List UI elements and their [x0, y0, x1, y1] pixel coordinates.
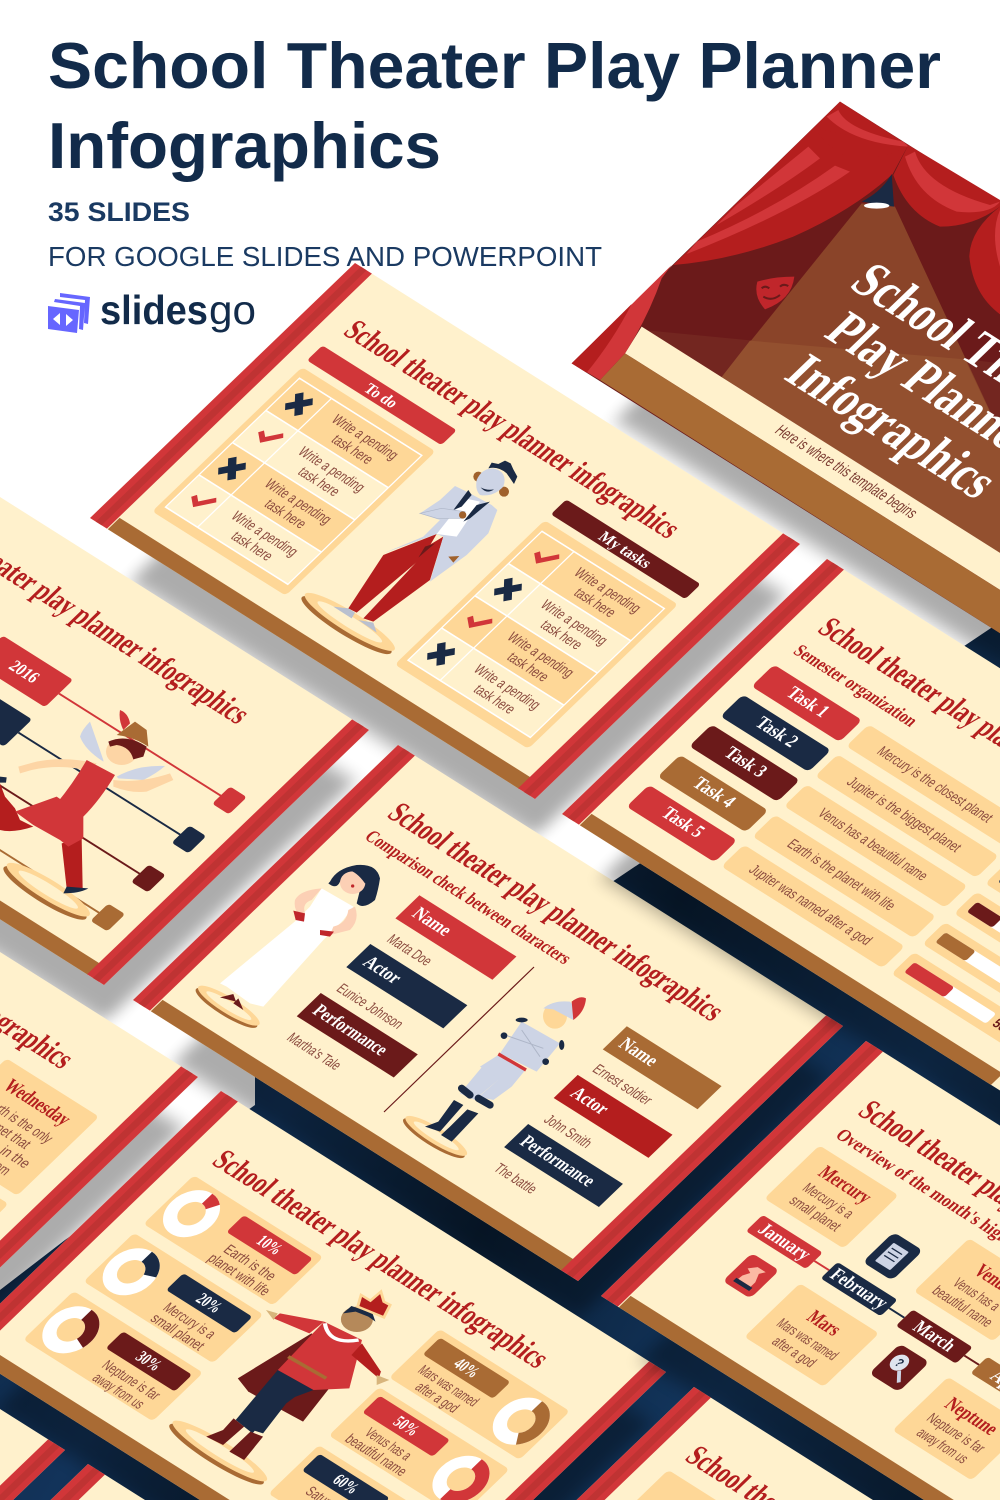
subheading: slide count: 35 SLIDES	[48, 197, 190, 227]
task descriptions: Jupiter was named after a god	[745, 862, 875, 949]
month timeline: January	[754, 1219, 817, 1264]
panel: 10%: planet with life	[204, 1251, 274, 1299]
panel: mercury	[764, 1145, 899, 1248]
icon: document	[863, 1232, 923, 1281]
panel: neptune: away from us	[912, 1425, 972, 1467]
panel: 20%: 20%	[192, 1289, 227, 1317]
task descriptions: Venus has a beautiful name	[814, 806, 931, 884]
panel: neptune: Neptune is far	[922, 1411, 989, 1457]
slide content	[133, 745, 843, 1281]
slide content: Semester organization	[789, 641, 923, 730]
slide: percentage donuts with king	[0, 1091, 666, 1500]
panel: 40%: Mars was named	[414, 1363, 482, 1410]
task labels: Task 2	[751, 713, 803, 751]
task labels: Task 4	[688, 773, 741, 811]
panel: mercury: small planet	[785, 1193, 845, 1235]
my tasks column: My tasks	[594, 528, 656, 572]
left character labels: Name	[408, 903, 457, 940]
my tasks column: task here	[570, 585, 619, 621]
subheading: platforms: FOR GOOGLE SLIDES AND POWERPOINT	[48, 241, 602, 272]
panel: 30%: away from us	[88, 1370, 148, 1412]
slide: to do and my tasks	[90, 263, 800, 837]
logo: slidesgo: slides	[100, 287, 208, 333]
right character labels: Performance	[516, 1131, 600, 1190]
panel: 30%	[22, 1291, 203, 1423]
panel: 40%	[389, 1329, 570, 1460]
character: knight in armor	[425, 997, 586, 1142]
icon: magnifier with question mark	[869, 1344, 930, 1392]
right character labels: Ernest soldier	[588, 1062, 656, 1109]
my tasks column: Write a pending	[503, 630, 578, 681]
panel: 20%	[82, 1233, 263, 1364]
panel: 20%: small planet	[146, 1311, 208, 1354]
slide: timeline	[0, 449, 369, 1023]
right character labels: Actor	[566, 1083, 614, 1118]
left character labels: Martha's Tale	[283, 1030, 345, 1074]
icon: chess knight	[723, 1253, 779, 1299]
panel: 40%: 40%	[449, 1354, 485, 1382]
timeline bars: 2016	[4, 656, 44, 687]
panel: mars: Mars was named	[772, 1316, 842, 1364]
slide content	[0, 796, 198, 1332]
left character labels: Marta Doe	[383, 932, 436, 969]
task descriptions	[721, 724, 1000, 968]
to do column: Write a pending	[261, 476, 335, 528]
slide: comparison check between characters	[133, 745, 843, 1319]
panel: 10%: 10%	[252, 1231, 288, 1259]
panel: venus	[914, 1238, 1000, 1341]
right character labels: The battle	[490, 1161, 541, 1197]
slide: lower right partially visible	[429, 1387, 1000, 1500]
panel: 10%: Earth is the	[219, 1242, 280, 1284]
logo: slidesgo: go	[209, 287, 256, 333]
left character labels: Actor	[359, 952, 407, 987]
month timeline: March	[908, 1317, 961, 1355]
progress bars	[891, 832, 1000, 1052]
my tasks column: Write a pending	[470, 662, 544, 713]
divider line	[384, 967, 534, 1112]
to do column: To do	[360, 380, 402, 412]
panel: 30%: 30%	[131, 1347, 167, 1375]
to do column: task here	[227, 529, 276, 564]
logo: slidesgo	[48, 287, 256, 333]
slide content	[0, 449, 369, 985]
character: king with crown	[206, 1292, 390, 1460]
slide: semester organization	[562, 559, 1000, 1133]
slide content	[90, 263, 800, 799]
heading: School Theater Play Planner	[48, 29, 941, 102]
slide content	[0, 1091, 666, 1500]
my tasks column: task here	[503, 650, 552, 685]
slide content: School theater play planner infographics	[380, 797, 731, 1027]
to do column: task here	[294, 464, 343, 500]
left character labels	[273, 895, 518, 1099]
right character labels: John Smith	[540, 1112, 596, 1152]
task labels: Task 5	[657, 803, 709, 841]
character: man in grey jacket	[333, 461, 517, 633]
panel: 60%: 60%	[328, 1470, 364, 1498]
slide: weekly overview (partially visible)	[0, 796, 198, 1370]
icon: theater mask	[756, 277, 794, 309]
slide content: School theater play planner infographics	[205, 1144, 556, 1374]
left character labels: Performance	[308, 1000, 393, 1059]
left character labels: Eunice Johnson	[332, 981, 407, 1032]
title and subtitle text: Here is where this template begins	[771, 422, 921, 522]
panel: mercury: Mercury is a	[798, 1180, 857, 1222]
character: lady in white dress	[220, 865, 380, 1010]
title and subtitle text	[724, 252, 1000, 552]
character: winged dancer	[0, 710, 173, 893]
my tasks column	[395, 499, 701, 749]
panel: mars	[744, 1283, 879, 1387]
my tasks column: task here	[469, 682, 519, 718]
my tasks column: Write a pending	[537, 597, 611, 649]
month timeline: February	[826, 1265, 894, 1313]
wednesday panel	[0, 1058, 99, 1283]
panel: neptune	[892, 1377, 1000, 1480]
right character labels	[480, 1026, 723, 1228]
task labels: Task 1	[782, 683, 834, 721]
slide: lower left corner slides (partially visible)	[0, 1169, 533, 1500]
slide: monthly highlights timeline	[601, 1041, 1000, 1500]
to do column: Write a pending	[327, 412, 402, 463]
panel: 10%	[143, 1175, 323, 1306]
to do column	[151, 345, 457, 596]
to do column: task here	[260, 497, 310, 532]
panel: 50%: 50%	[389, 1412, 424, 1440]
heading	[48, 29, 941, 182]
task descriptions: Earth is the planet with life	[783, 837, 899, 914]
panel: mars: Mars	[801, 1307, 846, 1341]
right character labels: Name	[614, 1034, 664, 1070]
slide content: Comparison check between characters	[361, 826, 577, 968]
panel: 50%: beautiful name	[341, 1432, 411, 1480]
month timeline	[746, 1215, 1000, 1411]
panel: 50%: Venus has a	[361, 1425, 415, 1464]
to do column: Write a pending	[294, 444, 369, 496]
task descriptions: Jupiter is the biggest planet	[843, 774, 965, 856]
panel: 40%: after a god	[411, 1380, 462, 1416]
panel: 60%	[268, 1445, 449, 1500]
my tasks column: task here	[536, 618, 586, 653]
timeline bars	[0, 636, 252, 938]
slide content	[562, 559, 1000, 1095]
task labels: Task 3	[720, 743, 772, 781]
slide content: School theater play planner infographics	[336, 315, 688, 545]
to do column: task here	[327, 432, 377, 468]
task labels	[626, 665, 862, 862]
my tasks column: Write a pending	[570, 565, 645, 616]
slide content	[601, 1041, 1000, 1500]
panel: 50%	[328, 1387, 510, 1500]
slide: title with stage curtains	[572, 102, 1000, 676]
heading: Infographics	[48, 109, 441, 182]
stage artwork	[572, 102, 1000, 644]
icon: magnifier with question mark: ?	[891, 1356, 908, 1370]
panel: mercury: Mercury	[813, 1162, 877, 1208]
panel: 20%: Mercury is a	[159, 1300, 219, 1342]
wednesday panel: Wednesday	[0, 1076, 76, 1130]
to do column: Write a pending	[227, 509, 302, 560]
panel: mars: after a god	[768, 1334, 820, 1371]
panel: 30%: Neptune is far	[98, 1358, 164, 1404]
